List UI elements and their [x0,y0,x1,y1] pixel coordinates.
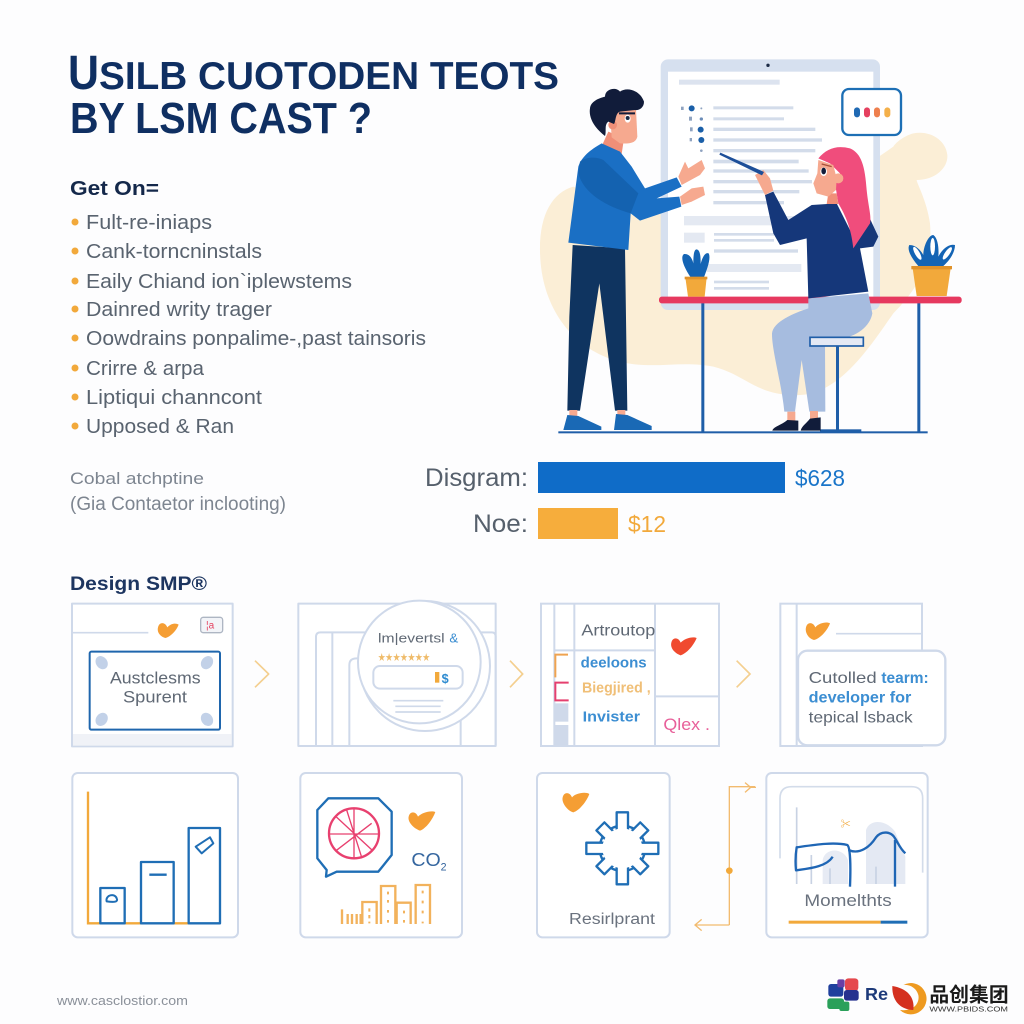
logo text: Re: Re [865,984,888,1004]
panel: CO2 icon: CO [411,849,441,870]
panel: gear icon [537,773,670,937]
panel 2: ★★★★★★★ [378,653,430,663]
panel 1: Austclesms [110,668,201,687]
comparison bar chart: Noe: [473,510,528,538]
man sleeve shading [578,158,638,213]
man neck [603,132,624,154]
logo mark: leaf [892,983,927,1014]
panel 4: Cutolled [809,670,877,687]
footer url: www.casclostior.com [56,993,188,1008]
panel 3: Biegjired , [582,681,651,697]
note text [70,469,286,515]
panel 4: tearm: [881,670,929,687]
logo text: url: WWW.PBIDS.COM [929,1007,1008,1014]
logo mark: puzzle [827,978,859,1011]
bullet list: Dainred writy trager [86,299,272,321]
woman neck [827,193,838,204]
panel 2: & [449,630,458,645]
bullet list [72,212,426,438]
man legs [567,245,627,411]
man hair [590,89,644,136]
title [68,47,559,143]
panel 3: Artroutop [581,622,655,639]
panel 3: Qlex . [663,715,710,734]
bullet list: Upposed & Ran [86,416,234,438]
connector arrows [695,783,756,931]
man hands [678,160,705,205]
comparison bar chart: $628 [795,465,845,491]
bullet list: Liptiqui channcont [86,387,262,409]
man ankles and shoes [563,410,652,430]
note text: (Gia Contaetor inclooting) [70,494,286,515]
bullet list: Crirre & arpa [86,358,205,380]
table [558,297,962,433]
arrow [255,661,269,687]
section heading: Design SMP® [70,574,207,595]
panel 4: tepical lsback [809,710,913,727]
title: BY LSM CAST ? [70,94,372,143]
logos [827,978,1009,1014]
woman face [813,160,837,197]
woman eye [820,164,832,176]
panel 1 [72,604,233,746]
bullet list: Eaily Chiand ion`iplewstems [86,271,352,293]
illustration: two people at a board [540,59,962,433]
panel 2: $ [442,672,449,686]
man sweater [568,143,682,250]
panel 3: Invister [583,709,640,725]
stool [810,337,863,432]
comparison bar chart: Disgram: [425,464,528,492]
panel: CO2 icon [300,773,462,937]
woman trousers [772,293,872,412]
man eye [619,113,635,123]
panel: line chart: Momelthts [804,891,892,910]
woman hand [755,170,773,195]
chat bubble icon [842,89,901,135]
panel: CO2 icon: 2 [441,862,447,874]
panel: line chart: ✂ [841,820,851,831]
woman ankles and shoes [772,411,821,431]
panel 2 [298,601,496,746]
background blob [540,133,947,395]
arrow [737,661,750,687]
man [563,89,705,430]
arrow [510,661,523,687]
gear [586,812,658,884]
note text: Cobal atchptine [70,469,204,488]
title: U [68,47,99,100]
woman hair [818,147,870,248]
plant: left [682,249,709,297]
bullet list: Fult-re-iniaps [86,212,212,234]
bullet list: Oowdrains ponpalime-,past tainsoris [86,328,426,350]
man ear [608,121,617,129]
man head [611,109,637,144]
comparison bar chart: $12 [628,511,666,537]
woman ear [833,173,843,183]
plant: right [909,235,955,296]
woman sweater [765,192,878,298]
top row panels 3 and 4 [510,604,945,746]
comparison bar chart [425,462,845,539]
panel 1: Spurent [123,688,187,707]
list heading: Get On= [70,178,159,200]
panel 3 [541,604,719,746]
panel 1: ¦a [206,621,215,632]
title: SILB CUOTODEN TEOTS [99,55,559,98]
panel: bar icon [72,773,238,937]
bullet list: Cank-torncninstals [86,241,262,263]
bottom row panels 3 and 4 [537,773,928,937]
woman [719,147,878,432]
pen [719,153,764,175]
logo text: chinese: 品创集团 [929,983,1009,1006]
whiteboard [661,59,880,310]
panel 3: deeloons [581,655,647,671]
panel 4 [780,604,945,746]
panel: line chart [766,773,928,937]
top row panels 1 and 2 [72,601,496,746]
bottom row panels 1 and 2 [72,773,462,937]
panel 4: developer for [809,690,911,707]
panel: gear icon: Resirlprant [569,911,656,928]
panel 2: lm|evertsl [378,630,445,645]
